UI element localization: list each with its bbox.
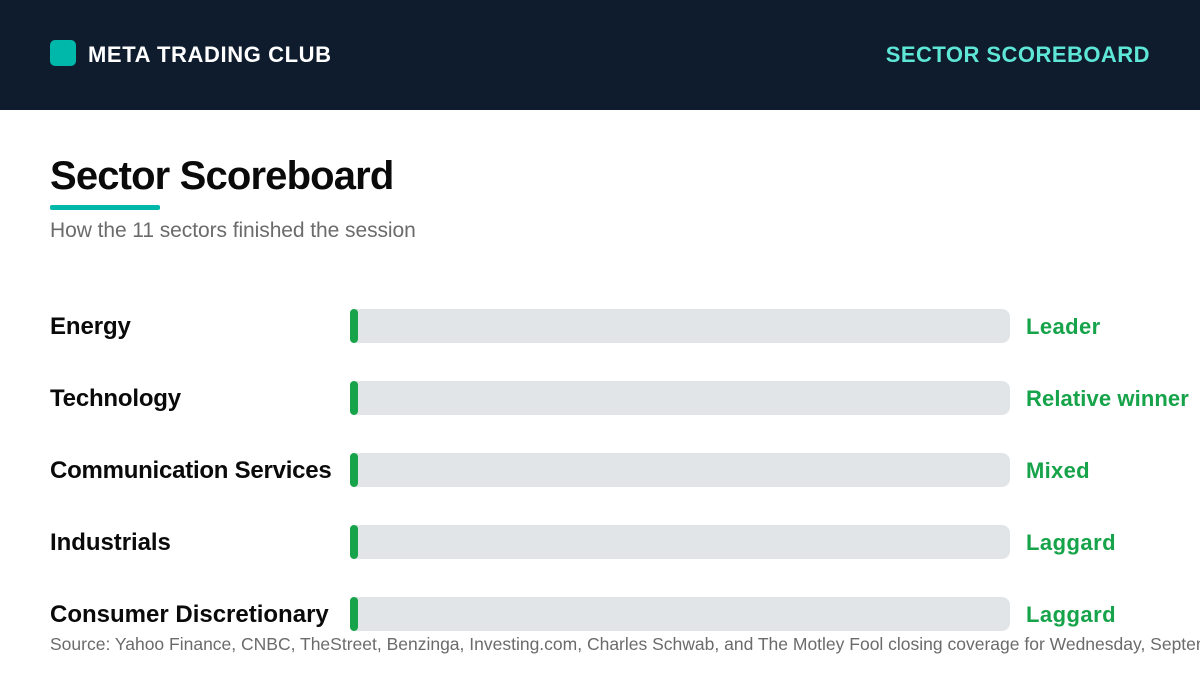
bar fill bbox=[350, 381, 358, 415]
status label: Mixed bbox=[1026, 458, 1090, 483]
sector name: Energy bbox=[50, 313, 131, 340]
bar fill bbox=[350, 597, 358, 631]
subtitle: How the 11 sectors finished the session bbox=[50, 219, 416, 242]
header band bbox=[0, 0, 1200, 110]
title underline accent bbox=[50, 205, 160, 210]
sector name: Communication Services bbox=[50, 457, 331, 484]
status label: Leader bbox=[1026, 314, 1101, 339]
sector name: Technology bbox=[50, 385, 181, 412]
status label: Relative winner bbox=[1026, 386, 1189, 411]
brand name: META TRADING CLUB bbox=[88, 42, 332, 67]
header section label: SECTOR SCOREBOARD bbox=[886, 42, 1150, 67]
bar track bbox=[350, 381, 1010, 415]
row: Communication Services bbox=[50, 453, 1090, 487]
row: Technology bbox=[50, 381, 1189, 415]
bar track bbox=[350, 309, 1010, 343]
bar fill bbox=[350, 309, 358, 343]
row: Consumer Discretionary bbox=[50, 597, 1116, 631]
bar fill bbox=[350, 453, 358, 487]
title: Sector Scoreboard bbox=[50, 154, 393, 198]
icon: brand square bbox=[50, 40, 76, 66]
bar track bbox=[350, 597, 1010, 631]
sector name: Consumer Discretionary bbox=[50, 601, 329, 628]
bar track bbox=[350, 453, 1010, 487]
status label: Laggard bbox=[1026, 530, 1116, 555]
status label: Laggard bbox=[1026, 602, 1116, 627]
bar fill bbox=[350, 525, 358, 559]
bar track bbox=[350, 525, 1010, 559]
sector name: Industrials bbox=[50, 529, 171, 556]
row: Industrials bbox=[50, 525, 1116, 559]
row: Energy bbox=[50, 309, 1101, 343]
